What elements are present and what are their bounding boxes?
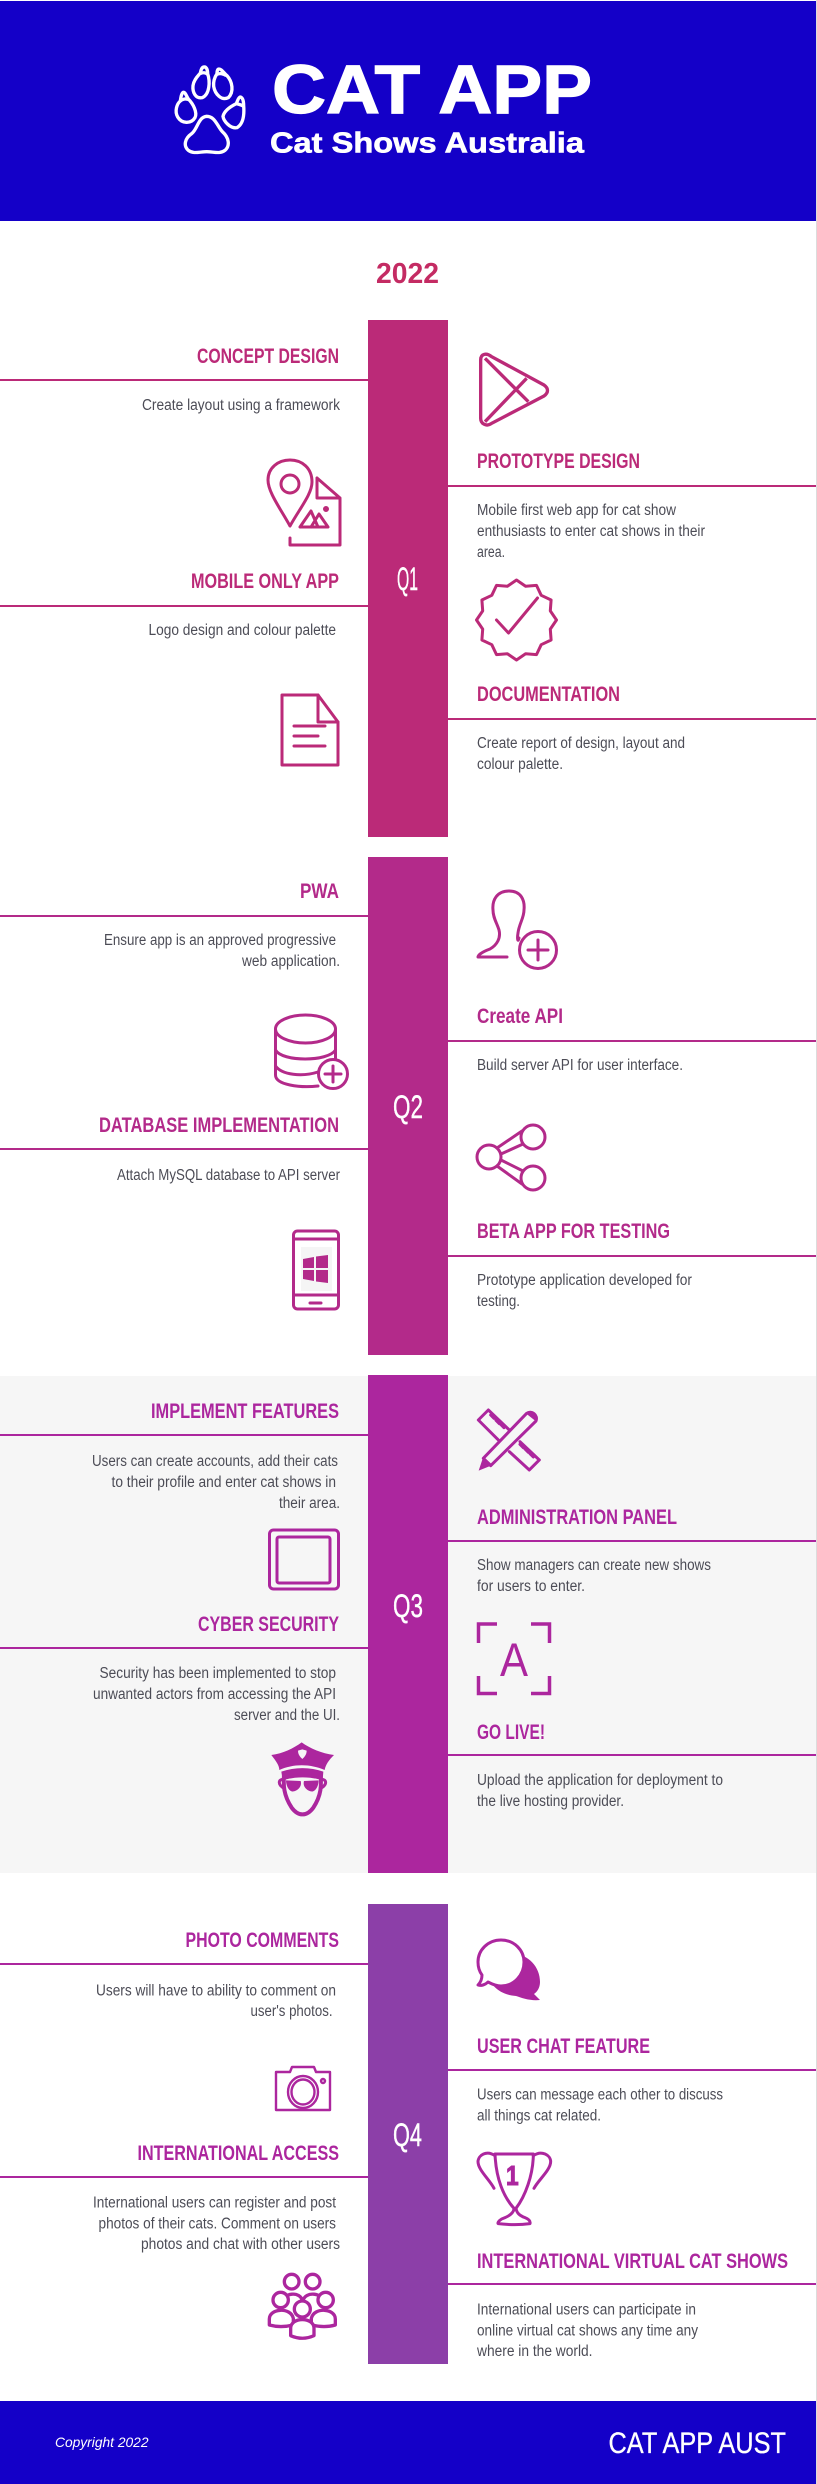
icon: map pin and image file (268, 460, 340, 545)
milestone: prototype design (448, 450, 816, 561)
milestone: administration panel (448, 1506, 816, 1595)
icon: letter A in brackets: A (500, 1633, 529, 1686)
milestone: administration panel: for users to enter. (477, 1578, 585, 1595)
Q2 bar (368, 857, 448, 1355)
milestone: PWA: Ensure app is an approved progressive (104, 932, 336, 949)
milestone: international access: INTERNATIONAL ACCESS (138, 2142, 339, 2165)
icon: share nodes (477, 1125, 545, 1190)
icon: windows phone (294, 1231, 338, 1309)
milestone: photo comments: PHOTO COMMENTS (186, 1929, 339, 1952)
milestone: implement features: to their profile and enter cat shows in (112, 1474, 336, 1491)
milestone: administration panel: Show managers can create new shows (477, 1557, 711, 1574)
icon: add user (478, 891, 556, 968)
milestone: go live: Upload the application for deployment to (477, 1772, 723, 1789)
milestone: beta app for testing: testing. (477, 1293, 520, 1310)
icon: ruler and pencil (478, 1410, 539, 1471)
milestone: go live: GO LIVE! (477, 1721, 545, 1744)
milestone: prototype design: enthusiasts to enter cat shows in their (477, 523, 705, 540)
icon: tablet square (270, 1530, 338, 1589)
milestone: cyber security: CYBER SECURITY (198, 1613, 339, 1636)
panel: Q4 (0, 1904, 816, 2364)
Q1 bar: Q1 (397, 561, 418, 597)
milestone: database implementation: DATABASE IMPLEMENTATION (99, 1114, 339, 1137)
milestone: concept design: CONCEPT DESIGN (197, 345, 339, 368)
milestone: beta app for testing: Prototype application developed for (477, 1272, 692, 1289)
milestone: international access: photos of their cats. Comment on users (98, 2216, 336, 2232)
milestone: photo comments: Users will have to ability to comment on (96, 1982, 336, 2000)
Q4 bar (368, 1904, 448, 2364)
milestone: cyber security (0, 1613, 368, 1724)
footer brand: CAT APP AUST (608, 2427, 786, 2460)
copyright: Copyright 2022 (55, 2434, 149, 2450)
milestone: prototype design: area. (477, 544, 505, 561)
icon: police officer (271, 1742, 334, 1814)
Q2 bar: Q2 (393, 1089, 423, 1125)
milestone: beta app for testing: BETA APP FOR TESTING (477, 1220, 670, 1243)
icon: trophy: 1 (506, 2160, 519, 2191)
header banner (0, 1, 816, 221)
footer banner (0, 2401, 816, 2484)
Q4 bar: Q4 (393, 2117, 422, 2153)
milestone: photo comments: user's photos. (250, 2003, 332, 2020)
milestone: documentation: colour palette. (477, 756, 563, 773)
milestone: create API: Create API (477, 1005, 563, 1028)
milestone: implement features: IMPLEMENT FEATURES (151, 1400, 339, 1423)
milestone: PWA: web application. (241, 953, 340, 970)
icon: camera (276, 2067, 330, 2110)
milestone: documentation: DOCUMENTATION (477, 683, 620, 706)
year heading: 2022 (376, 258, 439, 290)
icon: letter A in brackets (478, 1624, 550, 1694)
milestone: international access: International users can register and post (93, 2194, 337, 2212)
milestone: cyber security: server and the UI. (234, 1707, 340, 1724)
milestone: international virtual cat shows: International users can participate in (477, 2302, 696, 2318)
icon: database add (276, 1015, 348, 1088)
milestone: international virtual cat shows: where in the world. (476, 2343, 592, 2360)
icon: chat bubbles (478, 1940, 540, 2000)
milestone: cyber security: unwanted actors from accessing the API (93, 1686, 336, 1703)
milestone: cyber security: Security has been implemented to stop (100, 1665, 336, 1682)
panel: Q1 (0, 320, 816, 837)
milestone: photo comments (0, 1929, 368, 2020)
milestone: prototype design: Mobile first web app for cat show (477, 502, 677, 519)
milestone: prototype design: PROTOTYPE DESIGN (477, 450, 640, 473)
milestone: mobile only app: MOBILE ONLY APP (191, 570, 339, 593)
panel: Q3 (0, 1375, 816, 1873)
milestone: documentation (448, 683, 816, 773)
milestone: concept design (0, 345, 368, 414)
milestone: user chat feature (448, 2035, 816, 2124)
milestone: user chat feature: USER CHAT FEATURE (477, 2035, 650, 2058)
icon: trophy (478, 2153, 551, 2225)
milestone: go live (448, 1721, 816, 1810)
milestone: international virtual cat shows: online virtual cat shows any time any (477, 2322, 698, 2340)
milestone: beta app for testing (448, 1220, 816, 1310)
milestone: go live: the live hosting provider. (477, 1793, 624, 1810)
icon: group of people (269, 2274, 335, 2338)
milestone: international access (0, 2142, 368, 2253)
milestone: implement features (0, 1400, 368, 1512)
subtitle: Cat Shows Australia (270, 128, 585, 160)
milestone: user chat feature: Users can message each other to discuss (477, 2086, 723, 2104)
panel: Q2 (0, 857, 816, 1355)
milestone: mobile only app (0, 570, 368, 639)
milestone: user chat feature: all things cat related. (477, 2108, 601, 2124)
milestone: documentation: Create report of design, layout and (477, 735, 685, 752)
milestone: international virtual cat shows (448, 2250, 816, 2360)
milestone: database implementation (0, 1114, 368, 1184)
milestone: international access: photos and chat with other users (141, 2236, 340, 2253)
milestone: concept design: Create layout using a framework (142, 397, 340, 414)
milestone: administration panel: ADMINISTRATION PANEL (477, 1506, 677, 1529)
milestone: mobile only app: Logo design and colour palette (148, 622, 336, 639)
Q3 bar (368, 1375, 448, 1873)
icon: document (282, 695, 338, 765)
Q3 bar: Q3 (393, 1588, 423, 1624)
milestone: PWA (0, 880, 368, 970)
title: CAT APP (272, 51, 592, 128)
icon: paw print (176, 67, 244, 153)
icon: play store triangle (481, 354, 547, 425)
Q1 bar (368, 320, 448, 837)
milestone: implement features: their area. (279, 1495, 340, 1512)
milestone: create API: Build server API for user interface. (477, 1057, 683, 1074)
milestone: create API (448, 1005, 816, 1074)
milestone: implement features: Users can create accounts, add their cats (92, 1453, 338, 1470)
milestone: database implementation: Attach MySQL database to API server (117, 1167, 340, 1184)
milestone: PWA: PWA (300, 880, 339, 903)
icon: check badge (476, 580, 556, 660)
